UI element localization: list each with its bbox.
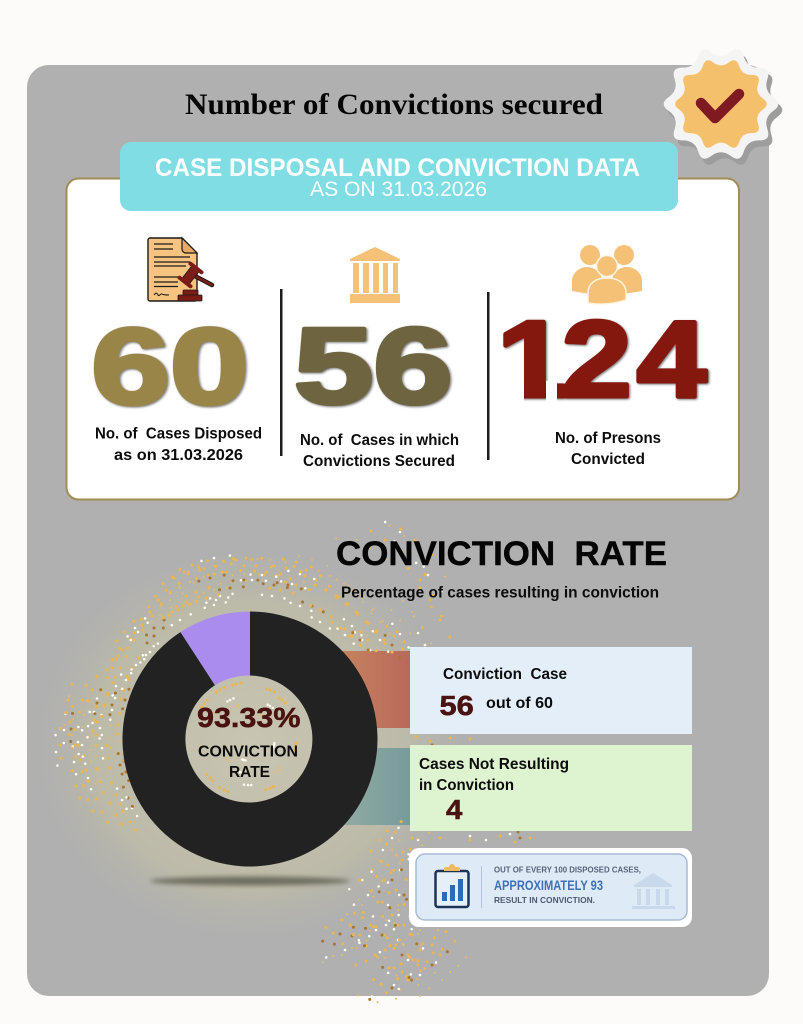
stat: 60 cases disposed: No. of Cases Disposed xyxy=(95,426,262,442)
stat: 60 cases disposed: as on 31.03.2026 xyxy=(114,447,243,464)
stat: 56 convictions secured: Convictions Secured xyxy=(303,453,455,470)
icon: group of people xyxy=(572,245,642,304)
callout text: APPROXIMATELY 93 xyxy=(494,878,603,893)
stat: 124 persons convicted: No. of Presons xyxy=(555,430,661,447)
stat: 124 persons convicted: 124 xyxy=(497,298,707,420)
box: conviction case xyxy=(410,647,692,734)
icon: check badge xyxy=(664,49,782,165)
callout: out of every 100 cases xyxy=(409,848,692,927)
rate value: 93.33% xyxy=(197,702,300,734)
stat: 60 cases disposed: 60 xyxy=(91,306,249,427)
glow behind donut xyxy=(25,540,475,950)
callout text: RESULT IN CONVICTION. xyxy=(494,895,595,905)
icon: clipboard chart xyxy=(436,864,468,907)
banner: case disposal heading: CASE DISPOSAL AND CONVICTION DATA xyxy=(155,154,640,182)
donut ground shadow xyxy=(150,876,350,886)
glitter particles xyxy=(35,513,547,1013)
stat: 124 persons convicted: Convicted xyxy=(571,451,645,468)
box: conviction case: Conviction Case xyxy=(443,666,567,683)
stat: 56 convictions secured: No. of Cases in which xyxy=(300,432,459,449)
icon: court building xyxy=(350,247,400,303)
connector bar: cases not resulting xyxy=(330,748,411,825)
rate label: RATE xyxy=(229,764,270,781)
box: conviction case: out of 60 xyxy=(486,695,553,712)
title: Number of Convictions secured xyxy=(185,89,604,121)
donut chart xyxy=(122,612,377,867)
box: cases not resulting in conviction: in Conviction xyxy=(419,777,514,794)
callout text xyxy=(494,864,641,905)
stat: 56 convictions secured: 56 xyxy=(294,306,453,426)
connector bar: conviction case xyxy=(330,651,411,728)
box: cases not resulting in conviction: Cases Not Resulting xyxy=(419,756,569,773)
box: conviction case: 56 xyxy=(440,691,474,722)
heading: conviction rate: CONVICTION RATE xyxy=(336,535,667,573)
subheading: percentage of cases: Percentage of cases resulting in conviction xyxy=(341,584,659,602)
heading: conviction rate xyxy=(336,535,667,602)
banner: case disposal heading xyxy=(120,142,678,211)
icon: faded court building xyxy=(632,873,675,909)
slice: not resulting in conviction xyxy=(180,612,250,685)
rate label xyxy=(198,744,298,781)
box: cases not resulting in conviction: 4 xyxy=(446,795,462,826)
icon: document and gavel xyxy=(148,238,212,301)
box: cases not resulting in conviction xyxy=(410,745,692,831)
banner: case disposal heading: AS ON 31.03.2026 xyxy=(310,178,487,201)
ring: convictions 93.33% xyxy=(122,612,377,867)
callout text: OUT OF EVERY 100 DISPOSED CASES, xyxy=(494,864,641,874)
panel: case data card xyxy=(66,142,739,500)
rate label: CONVICTION xyxy=(198,744,298,760)
